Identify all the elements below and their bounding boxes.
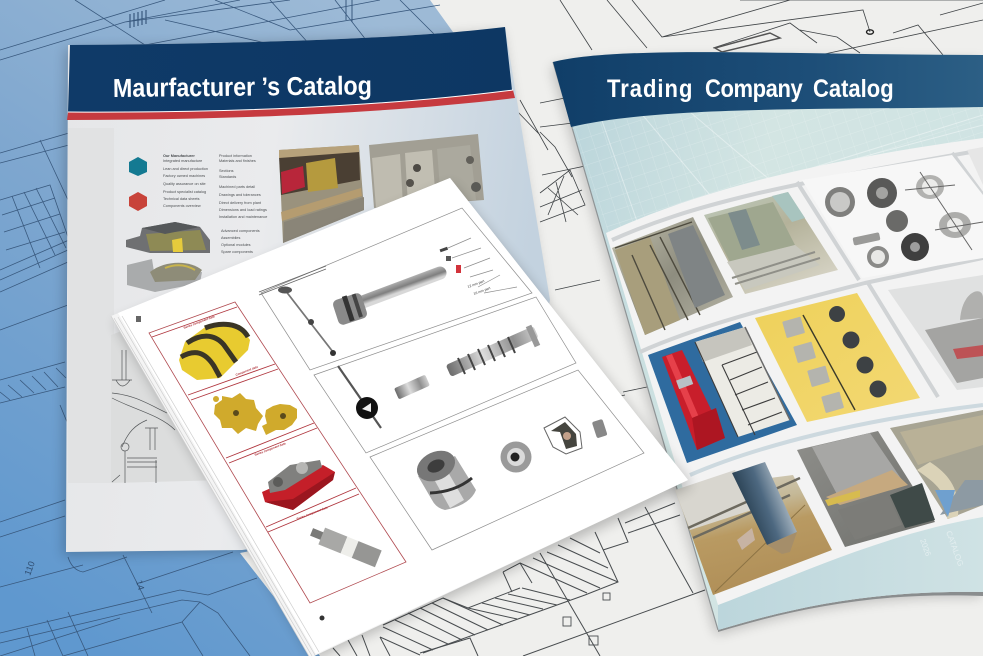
text block: feature column two: Materials and finishes — [219, 159, 256, 163]
image: grey machine — [127, 259, 202, 292]
frame: product row two — [314, 297, 576, 453]
text block: feature column two: Direct delivery from plant — [219, 201, 262, 205]
product: dark plate — [544, 417, 582, 454]
photo: beige machine detail — [890, 410, 983, 519]
photo: plant structure two — [704, 192, 838, 294]
product: bearing ring — [500, 442, 532, 472]
panel: blue with red cylinder and cabinet — [648, 322, 797, 463]
grey square parts — [782, 317, 844, 413]
product: thin rod — [278, 286, 336, 356]
white grid pattern on cover — [571, 107, 983, 233]
text block: feature column two: Dimensions and load ratings — [219, 208, 267, 212]
text block: feature column two — [219, 154, 267, 254]
text block: feature column two: Spare components — [221, 250, 253, 254]
text block: feature column two: Drawings and tolerances — [219, 193, 261, 197]
product: piston rod — [332, 273, 440, 326]
hatched section drawing under the pages — [333, 503, 705, 656]
icon: red hexagon — [129, 192, 147, 211]
dimension labels: 110 — [22, 560, 37, 577]
tiny red labels: Series component data — [296, 505, 328, 521]
product panel area — [606, 138, 983, 605]
legend: part callouts: 16 mm part — [473, 286, 491, 296]
legend: part callouts — [440, 238, 517, 296]
text block: feature column one: Factory owned machines — [163, 174, 205, 178]
navy header band — [553, 52, 983, 127]
text block: feature column two: Machined parts detail — [219, 185, 255, 189]
dimension labels: 14 — [134, 579, 146, 591]
dark cylinder — [732, 462, 797, 545]
catalog: open white product page — [111, 178, 692, 656]
product: small square — [592, 419, 608, 438]
catalog page — [66, 27, 550, 552]
catalog title: Trading — [607, 75, 693, 102]
frame: product row one — [259, 208, 532, 370]
catalog title: Company — [705, 75, 803, 102]
faint text on cover — [918, 530, 965, 567]
catalog title: Maurfacturer ’s Catalog — [113, 70, 372, 103]
teal cover page — [553, 52, 983, 630]
product: gold gears — [213, 393, 297, 435]
page number mark — [136, 316, 141, 322]
navy header band — [68, 27, 512, 112]
text block: feature column two: Advanced components — [221, 229, 260, 233]
catalog: manufacturer — [63, 27, 550, 556]
product: red block fixture — [262, 460, 335, 510]
product: small sleeve — [394, 375, 430, 399]
blue blueprint sheet — [0, 0, 500, 656]
left grey column — [68, 128, 114, 483]
white cabinet — [695, 327, 790, 437]
product: threaded shaft — [446, 325, 540, 377]
photo: plant structure one — [612, 217, 733, 335]
text block: feature column one: Product specialist catalog — [163, 190, 206, 194]
red stripe — [67, 90, 515, 120]
panel: component drawings — [802, 155, 983, 278]
image: yellow machine — [126, 222, 210, 253]
photo: wood floor with cylinder — [675, 462, 832, 595]
red table: product column — [149, 302, 406, 620]
lower page edge — [718, 592, 983, 632]
tiny red labels: Series component data — [183, 314, 215, 330]
product: yellow housing — [179, 324, 250, 380]
product: metal cylinder — [308, 524, 382, 567]
panel: grey line drawing right — [888, 147, 983, 390]
text block: feature column one: Technical data sheets — [163, 197, 200, 201]
tiny red labels: Series component data — [254, 441, 286, 457]
catalog: trading company — [551, 52, 983, 635]
text block: feature column two: Sections — [219, 169, 234, 173]
photo: grey machine detail — [797, 431, 935, 547]
text block: feature column one: Components overview — [163, 204, 201, 208]
text block: feature column two: Standards — [219, 175, 236, 179]
tiny red labels — [183, 314, 328, 521]
frame: product row three — [370, 370, 644, 550]
text block: feature column two: Optional modules — [221, 243, 251, 247]
text block: feature column one — [163, 154, 208, 208]
text block: feature column one: Quality assurance on site — [163, 182, 206, 186]
round dark parts — [829, 306, 886, 398]
dot marker — [320, 616, 324, 620]
text block: feature column one: Integrated manufacture — [163, 159, 202, 163]
red cylinder — [662, 350, 725, 450]
product: rod with black knob — [338, 366, 381, 428]
tiny red labels: Component data — [235, 365, 259, 377]
text block: feature column two: Installation and maintenance — [219, 215, 267, 219]
catalog title: Catalog — [813, 75, 894, 102]
grey panel dividers — [612, 150, 983, 475]
legend: part callouts: 12 mm part — [467, 279, 485, 289]
text block: feature column one: Lean and direct production — [163, 167, 208, 171]
panel: yellow with parts — [755, 293, 920, 422]
text block: feature column one: Our Manufacturer — [163, 154, 195, 158]
photo: control panels — [369, 134, 484, 208]
photo: workshop shelf — [279, 145, 364, 243]
text block: feature column two: Assemblies — [221, 236, 241, 240]
spine edge — [553, 62, 718, 630]
detail tags — [563, 593, 610, 645]
page stack edges — [111, 178, 688, 656]
icon: teal hexagon — [129, 157, 147, 176]
faint text on cover: CATALOG — [944, 530, 965, 567]
faint text on cover: 2026 — [918, 538, 933, 558]
sketch panel: lower left image — [111, 322, 225, 483]
dimension labels — [22, 560, 146, 591]
product: steel piston — [412, 445, 476, 510]
text block: feature column two: Product information — [219, 154, 252, 158]
